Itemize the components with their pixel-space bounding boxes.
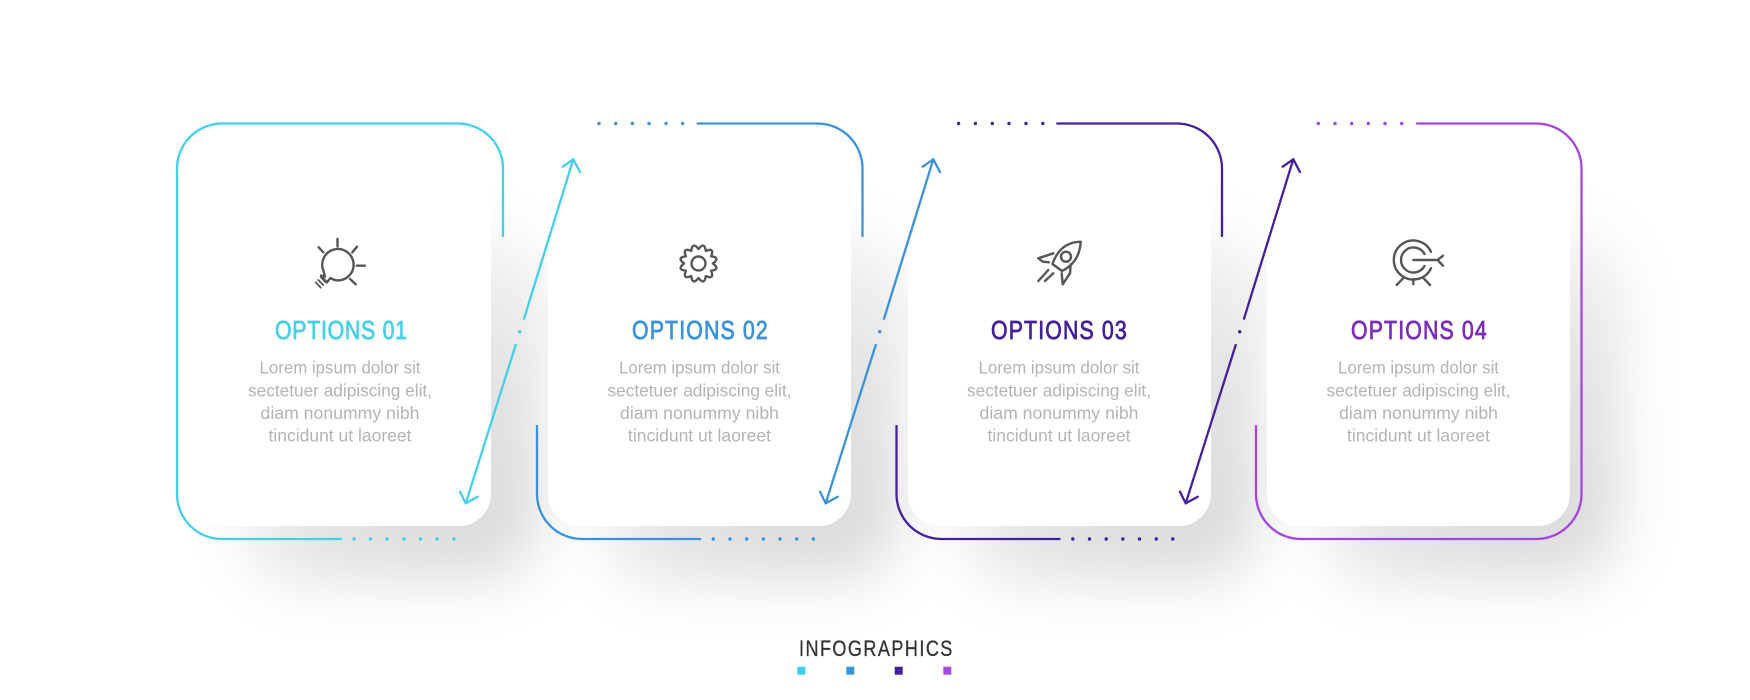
text: options 03 body: Lorem ipsum dolor sit bbox=[978, 358, 1140, 378]
heading: options 01: OPTIONS 01 bbox=[275, 316, 407, 346]
text: options 03 body: tincidunt ut laoreet bbox=[988, 426, 1131, 446]
heading: options 03: OPTIONS 03 bbox=[991, 316, 1127, 346]
heading: options 04: OPTIONS 04 bbox=[1351, 316, 1487, 346]
arrow: connector 2 to 3 bbox=[820, 159, 940, 503]
heading: options 02: OPTIONS 02 bbox=[632, 316, 768, 346]
legend: colour squares bbox=[797, 667, 951, 675]
text: options 04 body: sectetuer adipiscing elit, bbox=[1326, 380, 1510, 400]
title: infographics: INFOGRAPHICS bbox=[799, 637, 952, 661]
panel: card 4 background bbox=[1267, 115, 1619, 580]
text: options 01 body: diam nonummy nibh bbox=[260, 403, 420, 423]
text: options 04 body: diam nonummy nibh bbox=[1339, 403, 1498, 423]
text: options 03 body: sectetuer adipiscing elit, bbox=[967, 380, 1151, 400]
frame: option 1 outline bbox=[177, 124, 503, 540]
icon: gear bbox=[681, 246, 716, 281]
text: options 04 body: tincidunt ut laoreet bbox=[1347, 426, 1490, 446]
arrow: connector 3 to 4 bbox=[1180, 159, 1300, 503]
text: options 02 body bbox=[608, 358, 792, 446]
text: options 03 body bbox=[967, 358, 1151, 446]
text: options 01 body bbox=[248, 358, 432, 446]
text: options 01 body: sectetuer adipiscing elit, bbox=[248, 380, 432, 400]
text: options 02 body: tincidunt ut laoreet bbox=[628, 426, 771, 446]
panel: card 2 background bbox=[548, 115, 900, 580]
frame: option 2 outline bbox=[537, 122, 862, 540]
frame: option 3 outline bbox=[896, 122, 1222, 540]
panel: card 3 background bbox=[908, 115, 1259, 580]
text: options 02 body: Lorem ipsum dolor sit bbox=[619, 358, 780, 378]
text: options 01 body: tincidunt ut laoreet bbox=[268, 426, 412, 446]
panel: card 1 background bbox=[188, 115, 540, 580]
text: options 01 body: Lorem ipsum dolor sit bbox=[260, 358, 421, 378]
arrow: connector 1 to 2 bbox=[460, 159, 580, 503]
frame: option 4 outline bbox=[1256, 122, 1582, 539]
text: options 04 body: Lorem ipsum dolor sit bbox=[1338, 358, 1499, 378]
text: options 02 body: sectetuer adipiscing elit, bbox=[608, 380, 792, 400]
icon: light bulb bbox=[316, 239, 365, 288]
text: options 02 body: diam nonummy nibh bbox=[620, 403, 779, 423]
icon: target bbox=[1394, 241, 1443, 285]
text: options 03 body: diam nonummy nibh bbox=[980, 403, 1138, 423]
icon: rocket bbox=[1038, 242, 1081, 284]
text: options 04 body bbox=[1326, 358, 1510, 446]
